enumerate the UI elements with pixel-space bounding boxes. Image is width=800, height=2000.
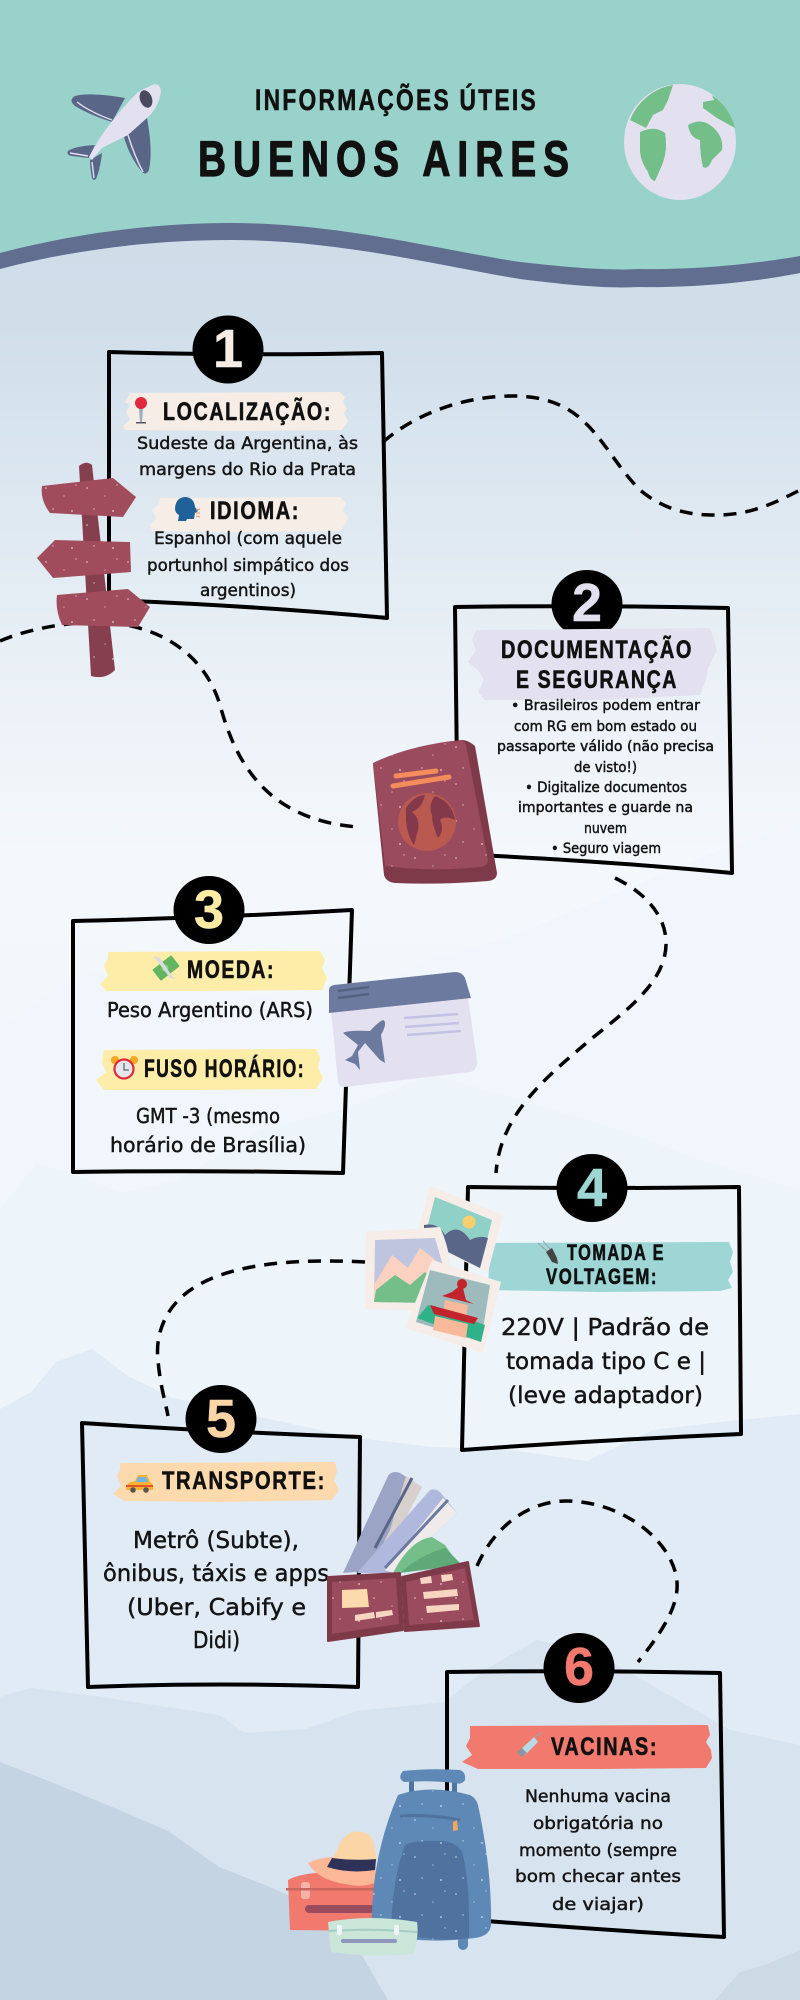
text documentação: • Brasileiros podem entrar — [511, 698, 700, 714]
icon: globe — [624, 84, 736, 200]
heading tomada: TOMADA E — [567, 1240, 665, 1265]
heading fuso horário: FUSO HORÁRIO: — [144, 1054, 305, 1083]
text vacinas — [515, 1787, 681, 1915]
banner transporte — [113, 1462, 339, 1502]
text documentação: com RG em bom estado ou — [514, 719, 697, 735]
text localização: margens do Rio da Prata — [139, 460, 356, 480]
text tomada — [501, 1315, 709, 1409]
text vacinas: obrigatória no — [533, 1814, 663, 1834]
header title: BUENOS AIRES — [198, 131, 576, 187]
green suitcase — [328, 1918, 418, 1956]
banner moeda — [100, 951, 327, 991]
wave stripe — [0, 223, 800, 287]
number 6: 6 — [564, 1637, 594, 1697]
text vacinas: Nenhuma vacina — [525, 1787, 671, 1807]
header band — [0, 0, 800, 287]
icon: clock — [111, 1056, 138, 1078]
icon: photos — [365, 1186, 503, 1353]
text vacinas: momento (sempre — [519, 1841, 677, 1861]
text documentação: • Digitalize documentos — [525, 780, 687, 796]
icon: signpost — [37, 463, 150, 677]
text moeda: Peso Argentino (ARS) — [107, 998, 313, 1022]
text idioma — [147, 529, 349, 601]
text fuso horário — [110, 1104, 306, 1157]
hat — [308, 1832, 377, 1886]
panel: transporte — [82, 1385, 360, 1687]
header subtitle: INFORMAÇÕES ÚTEIS — [255, 83, 538, 117]
icon: pin — [135, 397, 147, 424]
text tomada: tomada tipo C e | — [506, 1349, 706, 1375]
icon: taxi — [126, 1475, 153, 1493]
text localização: Sudeste da Argentina, às — [137, 434, 358, 454]
number 3: 3 — [194, 880, 224, 940]
text transporte: ônibus, táxis e apps — [103, 1561, 329, 1587]
banner localização — [123, 392, 348, 431]
dashed route 1 to 2 — [383, 396, 800, 515]
icon: airplane — [68, 84, 161, 180]
banner documentação — [468, 628, 717, 700]
number 4: 4 — [577, 1158, 607, 1218]
photo with pagoda — [405, 1260, 501, 1353]
text documentação — [497, 698, 714, 857]
number 2: 2 — [572, 573, 602, 633]
panel: tomada e voltagem — [462, 1154, 741, 1450]
number 5: 5 — [206, 1389, 236, 1449]
text documentação: nuvem — [584, 821, 627, 837]
text tomada: 220V | Padrão de — [501, 1315, 709, 1341]
text idioma: Espanhol (com aquele — [154, 529, 342, 549]
photo with mountains — [365, 1227, 450, 1312]
text transporte: (Uber, Cabify e — [127, 1595, 306, 1621]
icon: luggage — [286, 1769, 491, 1956]
text transporte: Didi) — [193, 1628, 240, 1654]
panel: documentação e segurança — [455, 570, 732, 873]
banner vacinas — [462, 1725, 712, 1769]
icon: boarding pass — [329, 972, 477, 1087]
text idioma: portunhol simpático dos — [147, 556, 349, 576]
icon: syringe — [517, 1733, 542, 1757]
dashed route 2 to 4 — [496, 878, 666, 1173]
panel: moeda e fuso horário — [73, 876, 352, 1173]
text localização — [137, 434, 358, 480]
icon: speaking head — [175, 497, 200, 521]
heading localização: LOCALIZAÇÃO: — [163, 396, 332, 426]
text documentação: • Seguro viagem — [551, 841, 661, 857]
heading moeda: MOEDA: — [187, 956, 275, 984]
text transporte: Metrô (Subte), — [133, 1528, 299, 1554]
dashed route 5 to 6 — [477, 1501, 677, 1662]
panel: vacinas — [447, 1633, 724, 1937]
red suitcase — [288, 1872, 378, 1931]
heading documentação — [501, 634, 693, 694]
icon: money — [152, 955, 180, 981]
dashed route into passport — [0, 622, 358, 827]
heading tomada — [546, 1240, 665, 1289]
heading transporte: TRANSPORTE: — [162, 1467, 326, 1495]
dashed route 4 to 5 — [157, 1261, 365, 1416]
text idioma: argentinos) — [200, 581, 296, 601]
icon: plug — [538, 1241, 558, 1264]
heading documentação: DOCUMENTAÇÃO — [501, 634, 693, 664]
heading tomada: VOLTAGEM: — [546, 1264, 658, 1289]
text fuso horário: GMT -3 (mesmo — [136, 1104, 280, 1128]
text documentação: de visto!) — [574, 760, 637, 776]
banner idioma — [150, 497, 348, 532]
text vacinas: de viajar) — [552, 1895, 644, 1915]
heading vacinas: VACINAS: — [551, 1733, 658, 1761]
number 1: 1 — [213, 319, 243, 379]
photo with sun — [416, 1186, 503, 1272]
banner fuso horário — [96, 1049, 323, 1090]
text tomada: (leve adaptador) — [508, 1383, 703, 1409]
text vacinas: bom checar antes — [515, 1867, 681, 1887]
text documentação: passaporte válido (não precisa — [497, 739, 714, 755]
text transporte — [103, 1528, 329, 1654]
text fuso horário: horário de Brasília) — [110, 1133, 306, 1157]
icon: wallet with tickets — [328, 1472, 479, 1641]
blue trolley bag — [372, 1769, 491, 1950]
panel: localização e idioma — [109, 316, 387, 618]
text documentação: importantes e guarde na — [518, 800, 693, 816]
banner tomada — [488, 1242, 733, 1292]
heading idioma: IDIOMA: — [210, 497, 300, 525]
heading documentação: E SEGURANÇA — [516, 666, 678, 694]
icon: passport — [373, 740, 497, 884]
